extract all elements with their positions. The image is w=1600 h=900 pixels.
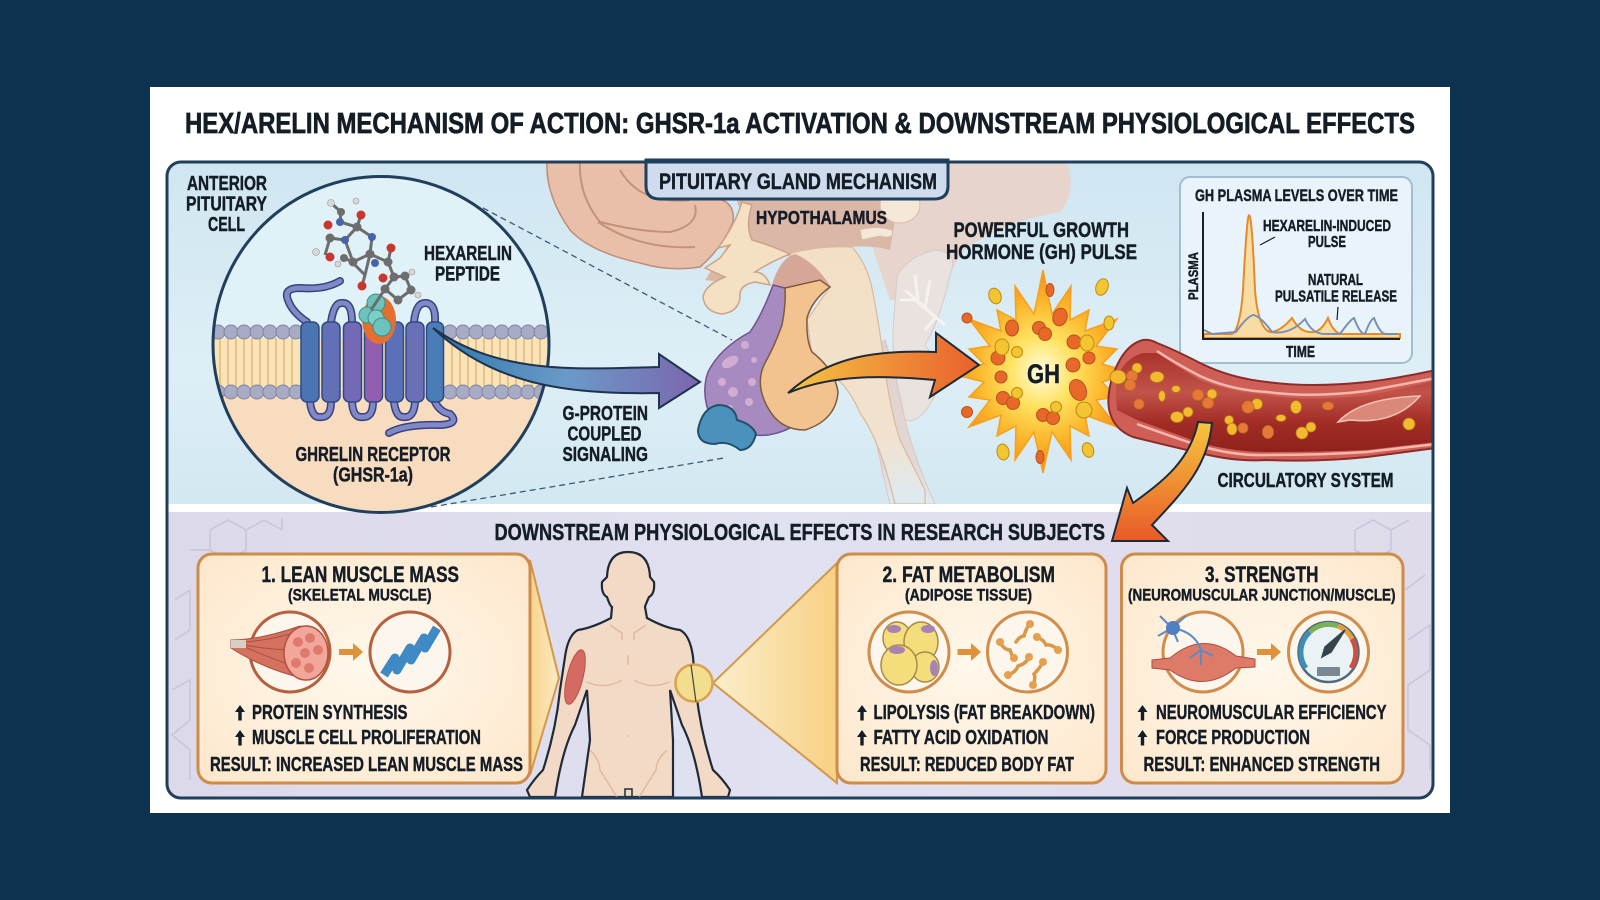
arrow: circulation to downstream effects — [1112, 422, 1212, 541]
result: RESULT: INCREASED LEAN MUSCLE MASS — [210, 754, 523, 776]
label: g-protein coupled signaling — [562, 403, 648, 466]
dashed zoom lines — [431, 208, 732, 507]
mauve cap above posterior lobe — [772, 254, 831, 288]
label: anterior pituitary cell — [186, 173, 268, 236]
bullets: PROTEIN SYNTHESIS — [252, 702, 408, 724]
receptor: GHSR-1a helices — [287, 281, 453, 433]
icons: up arrows — [1138, 705, 1148, 746]
decorative molecular background — [172, 518, 1430, 780]
white card — [150, 87, 1450, 813]
label: hexarelin peptide — [424, 243, 512, 286]
orange pulse curve — [1204, 215, 1400, 338]
label: anterior pituitary cell: CELL — [208, 214, 245, 236]
panel: fat metabolism: FATTY ACID OXIDATION — [874, 727, 1048, 749]
GH label: GH — [1027, 359, 1060, 389]
groin outline — [625, 789, 632, 797]
arrow: fat to fatty acids — [958, 643, 981, 661]
panel heading: 2. FAT METABOLISM — [882, 562, 1055, 587]
panel heading: 1. LEAN MUSCLE MASS — [262, 562, 459, 587]
label: g-protein coupled signaling: G-PROTEIN — [562, 403, 648, 425]
muscle highlight on arm — [560, 648, 590, 706]
cerebrum folds — [578, 164, 697, 248]
label: circulatory system: CIRCULATORY SYSTEM — [1218, 470, 1394, 492]
icon: fatty acids — [988, 612, 1068, 692]
brain stem — [787, 247, 925, 504]
label: ghrelin receptor — [296, 444, 451, 486]
panel: lean muscle mass — [198, 554, 530, 783]
panel: strength: FORCE PRODUCTION — [1156, 727, 1310, 749]
lipid tails — [210, 338, 550, 388]
axis label: time: TIME — [1286, 344, 1315, 361]
chart title: GH PLASMA LEVELS OVER TIME — [1195, 186, 1398, 205]
annotation: hexarelin-induced pulse: HEXARELIN-INDUCED — [1263, 218, 1391, 235]
label: powerful GH pulse — [946, 219, 1137, 264]
heading: downstream effects: DOWNSTREAM PHYSIOLOGICAL EFFECTS IN RESEARCH SUBJECTS — [494, 519, 1105, 545]
lipid heads — [211, 325, 548, 399]
pituitary heading tab — [646, 160, 948, 199]
panel: lean muscle mass: MUSCLE CELL PROLIFERATION — [252, 727, 481, 749]
icon: blue g-protein — [698, 405, 756, 450]
particles in bloodstream — [1110, 363, 1415, 439]
panel: pituitary mechanism background — [167, 162, 1433, 798]
vessel wall highlights — [1137, 351, 1436, 455]
icon: adipocytes — [869, 612, 949, 692]
label: hypothalamus: HYPOTHALAMUS — [756, 208, 887, 228]
icon: skeletal muscle — [231, 612, 330, 692]
label: anterior pituitary cell: ANTERIOR — [187, 173, 267, 195]
panel: fat metabolism: (ADIPOSE TISSUE) — [905, 586, 1032, 604]
panel outer border — [167, 162, 1433, 798]
icons: up arrows — [857, 705, 867, 746]
label: hexarelin peptide: HEXARELIN — [424, 243, 512, 265]
muscle in vessel — [1338, 396, 1420, 422]
illustration: brain and pituitary — [547, 160, 1071, 504]
chart: GH plasma levels over time — [1180, 177, 1412, 363]
axes — [1203, 212, 1400, 339]
posterior pituitary lobe — [760, 280, 838, 430]
panel heading: 3. STRENGTH — [1205, 562, 1318, 587]
upper brain mass — [870, 160, 1071, 300]
lobe highlights — [718, 341, 757, 411]
arrow: pituitary to GH burst — [788, 333, 979, 397]
cerebellum white tree — [900, 275, 945, 330]
chart: GH plasma levels over time: PULSE — [1308, 234, 1346, 251]
cerebrum — [547, 160, 733, 269]
icon: neuromuscular junction — [1152, 612, 1255, 692]
bullets: LIPOLYSIS (FAT BREAKDOWN) — [874, 702, 1095, 724]
axis label: plasma: PLASMA — [1185, 252, 1201, 300]
human body figure — [527, 552, 730, 797]
fat highlight circle — [676, 664, 712, 702]
result: RESULT: REDUCED BODY FAT — [860, 754, 1074, 776]
cerebellum — [893, 250, 953, 421]
panel: strength — [1122, 554, 1403, 783]
label: g-protein coupled signaling: SIGNALING — [562, 444, 648, 466]
label: powerful GH pulse: HORMONE (GH) PULSE — [946, 241, 1137, 264]
GH particles — [962, 284, 1095, 464]
GH burst — [948, 270, 1135, 473]
outer brain stem strip — [876, 339, 936, 504]
white thalamus shapes — [880, 200, 920, 224]
annotation: natural pulsatile release: NATURAL — [1308, 272, 1363, 289]
hypothalamus region — [705, 200, 894, 282]
panel: strength: (NEUROMUSCULAR JUNCTION/MUSCLE) — [1128, 586, 1396, 604]
label: powerful GH pulse: POWERFUL GROWTH — [954, 219, 1129, 242]
label: hexarelin peptide: PEPTIDE — [435, 264, 500, 286]
body details — [587, 625, 669, 797]
icon: force gauge — [1288, 612, 1368, 692]
infundibulum stalk and bulb — [703, 202, 790, 314]
molecule: hexarelin peptide — [312, 198, 421, 310]
arrow: receptor to pituitary — [433, 328, 700, 408]
zoom circle: anterior pituitary cell — [210, 176, 550, 520]
panel: fat metabolism — [837, 554, 1106, 783]
icons: up arrows — [235, 705, 245, 746]
label: ghrelin receptor: GHRELIN RECEPTOR — [296, 444, 451, 466]
panel: lean muscle mass: (SKELETAL MUSCLE) — [288, 586, 432, 604]
callout wedge to fat tissue — [713, 563, 837, 783]
icon: protein helix — [370, 612, 450, 692]
label: ghrelin receptor: (GHSR-1a) — [333, 464, 413, 486]
result: RESULT: ENHANCED STRENGTH — [1144, 754, 1380, 776]
blue natural curve — [1204, 315, 1398, 334]
pituitary heading tab: PITUITARY GLAND MECHANISM — [659, 169, 937, 194]
arrow: muscle to gauge — [1257, 643, 1281, 661]
label: g-protein coupled signaling: COUPLED — [568, 424, 642, 446]
anterior pituitary lobe — [705, 285, 795, 435]
callout wedge to muscle — [530, 560, 559, 775]
blood vessel — [1108, 340, 1436, 461]
hexarelin bound in receptor pocket — [359, 294, 396, 344]
label: anterior pituitary cell: PITUITARY — [186, 194, 268, 216]
infographic canvas — [150, 87, 1450, 813]
bullets: NEUROMUSCULAR EFFICIENCY — [1156, 702, 1387, 724]
arrow: muscle to protein — [339, 643, 363, 661]
chart: GH plasma levels over time: PULSATILE RELEASE — [1275, 288, 1397, 306]
